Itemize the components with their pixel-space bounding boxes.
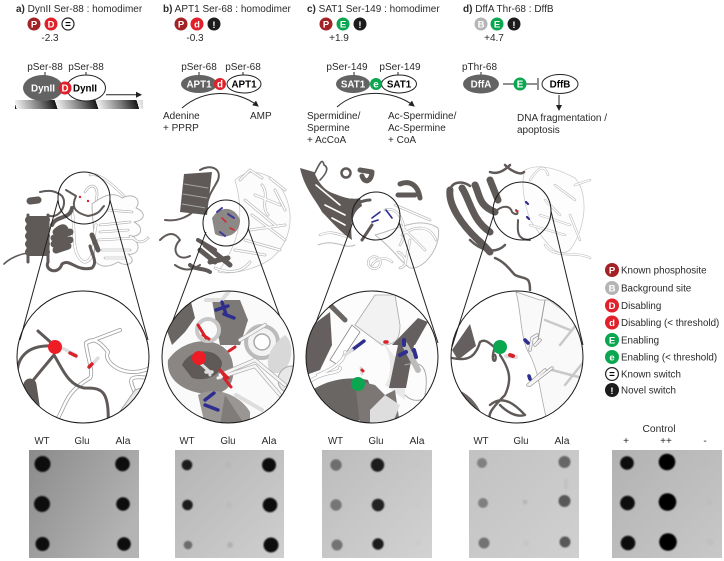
schematic: DffA inhibits DffB: E	[517, 80, 524, 90]
badges: panel c: +1.9	[329, 33, 349, 44]
schematic: SAT1 reaction: SAT1	[387, 80, 412, 90]
column labels: blot d: Ala	[554, 436, 570, 447]
schematic: APT1 reaction: pSer-68	[225, 62, 261, 73]
badges: panel c: !	[358, 20, 362, 31]
title: panel b: b) APT1 Ser-68 : homodimer	[163, 4, 292, 15]
schematic: SAT1 reaction: Spermidine/	[307, 111, 361, 122]
legend item: disabling: Disabling	[621, 301, 661, 312]
schematic: SAT1 reaction: pSer-149	[326, 62, 368, 73]
column labels: blot b	[180, 436, 277, 447]
schematic: APT1 reaction: + PPRP	[163, 123, 199, 134]
legend item: background site	[605, 281, 692, 295]
dot blot control	[612, 450, 722, 558]
legend item: known phosphosite: P	[609, 266, 616, 276]
badges: panel d: !	[512, 20, 516, 31]
schematic: SAT1 reaction: pSer-149	[379, 62, 421, 73]
schematic: DynII on DNA: pSer-88	[27, 62, 63, 73]
legend item: known phosphosite	[605, 263, 707, 277]
badges: panel a: P	[31, 20, 38, 30]
column labels: blot c: Ala	[410, 436, 425, 447]
zoom callout: DffA-DffB site	[452, 182, 583, 347]
column labels: blot a	[34, 436, 131, 447]
column labels: blot a: WT	[34, 436, 50, 447]
badges: panel a: =	[65, 20, 71, 30]
schematic: APT1 reaction: AMP	[250, 111, 272, 122]
schematic: DynII on DNA: DynII	[73, 84, 97, 94]
schematic: DffA inhibits DffB: apoptosis	[517, 125, 560, 136]
title: panel a: a) DynII Ser-88 : homodimer	[16, 4, 143, 15]
protein structure: SAT1	[300, 161, 439, 269]
protein structure: APT1	[160, 167, 290, 273]
legend item: known switch: =	[609, 370, 615, 380]
column labels: blot a: Ala	[116, 436, 131, 447]
dot blot d	[469, 450, 579, 558]
legend item: novel switch: Novel switch	[621, 386, 676, 396]
badges: panel d: +4.7	[484, 33, 504, 44]
schematic: DffA inhibits DffB: DffB	[550, 80, 570, 90]
badges: panel a: D	[48, 20, 55, 30]
column labels: blot c: WT	[328, 436, 343, 447]
protein structure: DynII	[4, 175, 148, 271]
title: panel d: d) DffA Thr-68 : DffB	[463, 4, 554, 15]
legend item: enabling below threshold	[605, 350, 717, 364]
schematic: DffA inhibits DffB: pThr-68	[462, 62, 497, 73]
schematic: APT1 reaction	[163, 62, 272, 134]
column labels: blot d: WT	[474, 436, 488, 447]
schematic: DynII on DNA	[15, 62, 143, 109]
column labels: control blot: Control	[642, 424, 676, 435]
schematic: SAT1 reaction: Ac-Spermine	[388, 123, 446, 134]
legend item: enabling below threshold: e	[609, 352, 615, 364]
legend item: disabling below threshold: d	[609, 318, 615, 329]
legend item: background site: Background site	[621, 284, 692, 294]
legend item: known switch: Known switch	[621, 370, 681, 380]
zoom circle: DynII	[17, 291, 150, 425]
schematic: APT1 reaction: Adenine	[163, 111, 200, 122]
badges: panel a: -2.3	[41, 33, 59, 44]
column labels: blot b: WT	[180, 436, 194, 447]
schematic: SAT1 reaction: + CoA	[388, 135, 416, 146]
column labels: blot a: Glu	[74, 436, 90, 447]
column labels: control blot: ++	[660, 436, 672, 447]
column labels: blot b: Glu	[220, 436, 236, 447]
zoom callout: DynII site	[20, 172, 148, 340]
schematic: DffA inhibits DffB	[462, 62, 607, 136]
column labels: control blot	[623, 424, 707, 447]
legend item: enabling: E	[609, 336, 615, 346]
column labels: control blot: -	[703, 436, 707, 447]
dot blot b	[175, 450, 284, 558]
schematic: SAT1 reaction: + AcCoA	[307, 135, 347, 146]
badges: panel b: d	[194, 20, 200, 30]
badges: panel c	[320, 18, 366, 44]
schematic: DffA inhibits DffB: DffA	[471, 80, 491, 90]
legend	[605, 263, 719, 397]
dot blot c	[322, 450, 432, 558]
badges: panel c: P	[323, 20, 330, 30]
zoom callout: SAT1 site	[307, 192, 438, 347]
zoom circle: DffA-DffB	[450, 291, 590, 425]
zoom callout: APT1 site	[163, 200, 293, 353]
badges: panel b: !	[212, 20, 216, 31]
badges: panel b: P	[178, 20, 185, 30]
column labels: blot b: Ala	[262, 436, 277, 447]
schematic: APT1 reaction: APT1	[186, 80, 212, 90]
badges: panel c: E	[340, 20, 346, 30]
badges: panel b	[174, 18, 220, 44]
schematic: SAT1 reaction: Ac-Spermidine/	[388, 111, 457, 122]
legend item: enabling: Enabling	[621, 336, 659, 346]
schematic: APT1 reaction: d	[217, 80, 223, 90]
legend item: disabling	[605, 298, 661, 312]
legend item: novel switch	[605, 383, 676, 397]
legend item: disabling below threshold: Disabling (< threshold)	[621, 318, 719, 329]
schematic: DynII on DNA: pSer-88	[68, 62, 104, 73]
protein structure: DffA-DffB	[450, 165, 590, 290]
column labels: blot d	[474, 436, 570, 447]
badges: panel d	[474, 18, 520, 44]
legend item: novel switch: !	[610, 386, 614, 397]
legend item: background site: B	[609, 284, 616, 294]
schematic: APT1 reaction: pSer-68	[181, 62, 217, 73]
badges: panel d: E	[494, 20, 500, 30]
title: panel c: c) SAT1 Ser-149 : homodimer	[307, 4, 440, 15]
schematic: SAT1 reaction: Spermine	[307, 123, 350, 134]
legend item: known switch	[606, 368, 681, 380]
zoom circle: SAT1	[306, 291, 438, 425]
schematic: SAT1 reaction: e	[373, 80, 379, 90]
badges: panel b: -0.3	[186, 33, 204, 44]
zoom circle: APT1	[162, 290, 294, 424]
legend item: enabling	[605, 333, 659, 347]
schematic: APT1 reaction: APT1	[231, 80, 257, 90]
dot blot a	[29, 450, 139, 558]
column labels: control blot: +	[623, 436, 629, 447]
legend item: disabling: D	[609, 301, 616, 312]
schematic: DynII on DNA: D	[61, 84, 69, 94]
badges: panel a	[28, 18, 74, 44]
schematic: DffA inhibits DffB: DNA fragmentation /	[517, 113, 607, 124]
badges: panel d: B	[478, 20, 485, 30]
column labels: blot d: Glu	[514, 436, 528, 447]
legend item: known phosphosite: Known phosphosite	[621, 266, 707, 276]
column labels: blot c	[328, 436, 425, 447]
column labels: blot c: Glu	[368, 436, 384, 447]
schematic: DynII on DNA: DynII	[31, 84, 55, 94]
schematic: SAT1 reaction	[307, 62, 457, 146]
legend item: enabling below threshold: Enabling (< threshold)	[621, 352, 717, 364]
legend item: disabling below threshold	[605, 316, 719, 330]
schematic: SAT1 reaction: SAT1	[341, 80, 366, 90]
